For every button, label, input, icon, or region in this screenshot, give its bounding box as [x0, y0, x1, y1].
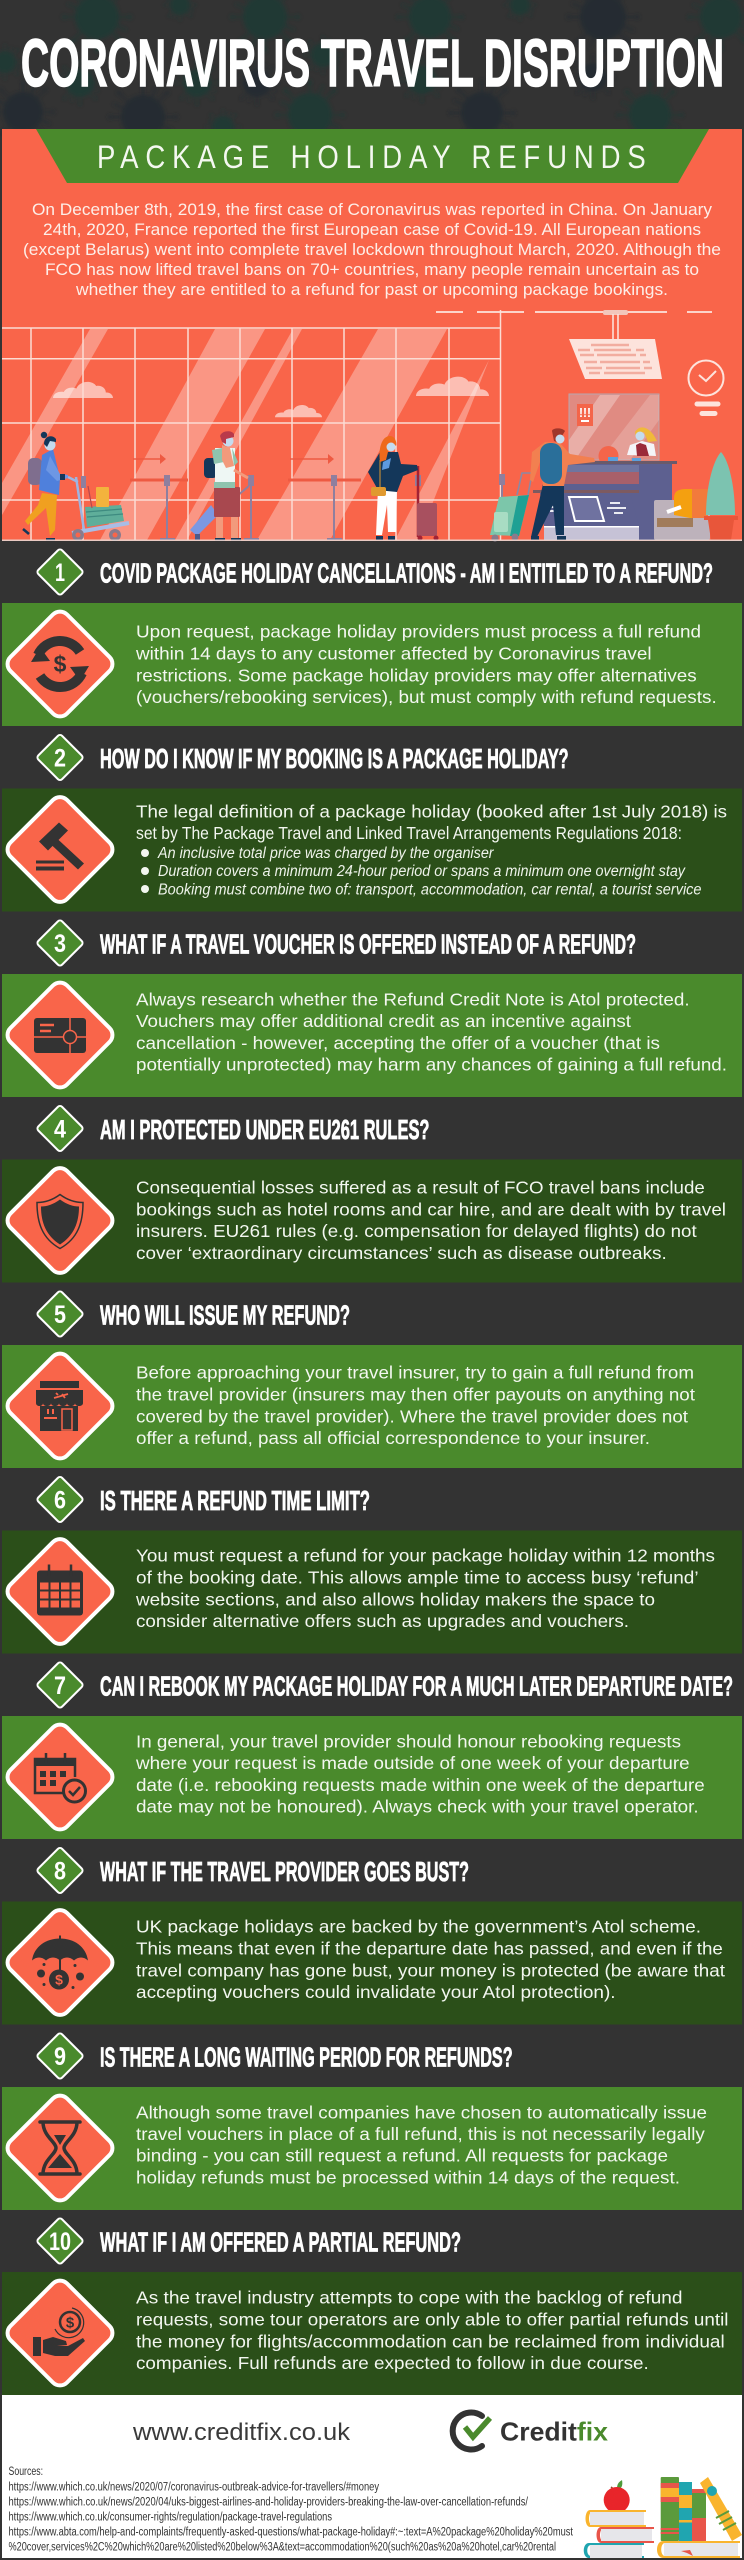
- heading 4: AM I PROTECTED UNDER EU261 RULES?: [100, 1114, 430, 1145]
- body text 3: cancellation - however, accepting the offer of a voucher (that is: [136, 1033, 660, 1053]
- heading 8: WHAT IF THE TRAVEL PROVIDER GOES BUST?: [100, 1856, 469, 1887]
- body text 7: where your request is made outside of one week of your departure: [135, 1753, 690, 1773]
- bullet list: Duration covers a minimum 24-hour period or spans a minimum one overnight stay: [158, 863, 686, 880]
- Creditfix logo: Creditfix: [500, 2417, 609, 2447]
- bullet list: An inclusive total price was charged by the organiser: [157, 845, 494, 862]
- body text 9: [136, 2102, 707, 2187]
- body text 6: of the booking date. This allows ample time to access busy ‘refund’: [136, 1567, 699, 1587]
- number badge 10: 10: [49, 2228, 71, 2256]
- sources: https://www.which.co.uk/consumer-rights/regulation/package-travel-regulations: [8, 2512, 332, 2524]
- body text 8: [136, 1917, 725, 2002]
- panel 3 background: [2, 974, 742, 1097]
- check-in counter: [533, 394, 677, 540]
- body text 4: cover ‘extraordinary circumstances’ such as disease outbreaks.: [136, 1243, 667, 1263]
- icon: hourglass: [3, 2091, 117, 2205]
- number badge 8: [36, 1847, 84, 1894]
- number badge 5: [36, 1290, 84, 1338]
- body text 5: offer a refund, pass all official correspondence to your insurer.: [136, 1428, 650, 1448]
- number badge 7: [36, 1661, 84, 1709]
- glass screen: [569, 394, 659, 460]
- body text 1: (vouchers/rebooking services), but must comply with refund requests.: [136, 687, 717, 707]
- body text 10: [136, 2288, 728, 2373]
- body text 2: The legal definition of a package holiday (booked after 1st July 2018) is: [136, 802, 727, 822]
- body text 6: You must request a refund for your package holiday within 12 months: [136, 1546, 715, 1566]
- icon: gavel: [3, 793, 117, 906]
- section 3: [2, 919, 742, 1097]
- body text 10: requests, some tour operators are only able to offer partial refunds until: [136, 2309, 728, 2329]
- queue barriers: [130, 454, 505, 540]
- window light beams: [2, 329, 489, 540]
- body text 3: Always research whether the Refund Credit Note is Atol protected.: [136, 989, 690, 1009]
- departures board: [569, 310, 662, 379]
- body text 10: As the travel industry attempts to cope with the backlog of refund: [136, 2288, 682, 2308]
- number badge 3: [36, 919, 84, 967]
- section 5: [2, 1290, 742, 1468]
- body text 4: insurers. EU261 rules (e.g. compensation for delayed flights) do not: [136, 1221, 697, 1241]
- number badge 2: [36, 734, 84, 781]
- number badge 6: [36, 1476, 84, 1523]
- body text 2: [136, 802, 727, 898]
- section 2: [2, 734, 742, 912]
- clouds: [53, 377, 489, 417]
- icon: travel shop: [3, 1349, 117, 1463]
- body text 10: companies. Full refunds are expected to follow in due course.: [136, 2353, 649, 2373]
- bench and orange bag: [654, 489, 710, 540]
- subtitle banner: PACKAGE HOLIDAY REFUNDS: [97, 140, 646, 176]
- person 2 with suitcase: [190, 431, 249, 540]
- bullet list: [141, 845, 702, 898]
- panel 8 background: [2, 1902, 742, 2024]
- person 3 with red hair: [368, 436, 438, 540]
- warning sign: [577, 404, 593, 426]
- body text 8: accepting vouchers could invalidate your Atol protection).: [136, 1982, 616, 2002]
- icon: umbrella with money: [3, 1906, 117, 2019]
- person 4 with backpack: [490, 428, 595, 542]
- panel 2 background: [2, 788, 742, 912]
- body text 8: travel company has gone bust, your money is protected (be aware that: [136, 1960, 725, 1980]
- panel 1 background: [2, 603, 742, 726]
- icon: calendar: [3, 1535, 117, 1648]
- clerk: [627, 427, 657, 456]
- body text 5: Before approaching your travel insurer, try to gain a full refund from: [136, 1363, 694, 1383]
- body text 5: covered by the travel provider). Where the travel provider does not: [136, 1406, 688, 1426]
- body text 5: the travel provider (insurers may then offer payouts on anything not: [136, 1384, 695, 1404]
- panel 6 background: [2, 1530, 742, 1654]
- number badge 1: 1: [55, 559, 65, 587]
- body text 6: consider alternative offers such as upgrades and vouchers.: [136, 1611, 629, 1631]
- body text 7: [135, 1731, 705, 1817]
- heading 5: WHO WILL ISSUE MY REFUND?: [100, 1300, 350, 1330]
- sources: [8, 2466, 574, 2554]
- section 1: [2, 548, 742, 726]
- body text 6: [135, 1546, 715, 1631]
- sources: https://www.which.co.uk/news/2020/07/coronavirus-outbreak-advice-for-travellers/#money: [8, 2482, 379, 2494]
- section 10: [2, 2217, 742, 2395]
- body text 10: the money for flights/accommodation can be reclaimed from individual: [136, 2331, 725, 2351]
- icon: umbrella with money: $: [55, 1972, 63, 1988]
- body text 4: [136, 1177, 726, 1263]
- icon: books and apple: [584, 2477, 742, 2558]
- body text 9: travel vouchers in place of a full refund, this is not necessarily legally: [136, 2124, 705, 2144]
- intro text: FCO has now lifted travel bans on 70+ countries, many people remain uncertain as to: [45, 260, 699, 279]
- panel 7 background: [2, 1716, 742, 1839]
- body text 4: bookings such as hotel rooms and car hire, and are dealt with by travel: [136, 1199, 726, 1219]
- number badge 10: [36, 2217, 84, 2265]
- intro text: [23, 200, 721, 299]
- panel 4 background: [2, 1160, 742, 1282]
- wall clock: [688, 360, 724, 414]
- icon: hand with coin: [3, 2276, 117, 2390]
- body text 1: Upon request, package holiday providers must process a full refund: [136, 622, 701, 642]
- number badge 8: 8: [54, 1858, 66, 1886]
- panel 9 background: [2, 2087, 742, 2210]
- body text 1: restrictions. Some package holiday providers may offer alternatives: [136, 665, 697, 685]
- panel: footer: [2, 2395, 742, 2558]
- section 9: [2, 2032, 742, 2210]
- person 1 with trolley: [23, 432, 129, 541]
- intro text: On December 8th, 2019, the first case of Coronavirus was reported in China. On January: [32, 200, 713, 219]
- intro background: [2, 129, 742, 541]
- body text 3: potentially unprotected) may harm any chances of gaining a full refund.: [136, 1055, 727, 1075]
- number badge 9: [36, 2032, 84, 2080]
- window frame: [2, 310, 500, 540]
- body text 7: date (i.e. rebooking requests made within one week of the departure: [136, 1775, 705, 1795]
- sources: https://www.abta.com/help-and-complaints/frequently-asked-questions/what-package-holiday#:~:text=A%20package%20holiday%20must: [8, 2527, 574, 2539]
- floor line: [2, 540, 742, 541]
- icon: hand with coin: $: [66, 2314, 75, 2332]
- body text 9: Although some travel companies have chosen to automatically issue: [136, 2102, 707, 2122]
- number badge 6: 6: [54, 1486, 66, 1514]
- intro text: whether they are entitled to a refund for past or upcoming package bookings.: [75, 280, 668, 299]
- body text 5: [136, 1363, 695, 1448]
- icon: refund cycle: [3, 607, 117, 721]
- number badge 1: [36, 548, 84, 596]
- icon: voucher: [3, 978, 117, 1092]
- sources: %20cover,services%2C%20which%20are%20listed%20below%3A&text=accommodation%20(such%20as%20a%20hotel,car%20rental: [8, 2542, 556, 2554]
- Creditfix logo: [453, 2412, 609, 2450]
- heading 10: WHAT IF I AM OFFERED A PARTIAL REFUND?: [100, 2226, 461, 2258]
- sources: Sources:: [8, 2466, 43, 2478]
- section 4: [2, 1105, 742, 1282]
- section 8: [2, 1847, 742, 2024]
- number badge 2: 2: [54, 744, 66, 772]
- virus pattern background: [0, 0, 744, 152]
- icon: shield: [3, 1164, 117, 1277]
- body text 2: set by The Package Travel and Linked Travel Arrangements Regulations 2018:: [136, 823, 682, 843]
- body text 9: binding - you can still request a refund. All requests for package: [136, 2146, 668, 2166]
- panel: intro: [2, 129, 742, 542]
- body text 9: holiday refunds must be processed within 14 days of the request.: [136, 2167, 680, 2187]
- icon: calendar with check: [3, 1720, 117, 1834]
- warning sign: !!!: [579, 405, 591, 420]
- number badge 5: 5: [54, 1301, 66, 1329]
- number badge 4: [36, 1105, 84, 1152]
- body text 3: Vouchers may offer additional credit as an incentive against: [136, 1011, 631, 1031]
- section 7: [2, 1661, 742, 1839]
- apple: [604, 2480, 630, 2513]
- panel 5 background: [2, 1345, 742, 1468]
- sources: https://www.which.co.uk/news/2020/04/uks-biggest-airlines-and-holiday-providers-breaking-the-law-over-cancellation-refunds/: [8, 2497, 529, 2509]
- section 6: [2, 1476, 742, 1654]
- heading 6: IS THERE A REFUND TIME LIMIT?: [100, 1485, 370, 1516]
- body text 8: This means that even if the departure date has passed, and even if the: [136, 1938, 723, 1958]
- panel 10 background: [2, 2272, 742, 2395]
- body text 8: UK package holidays are backed by the government’s Atol scheme.: [136, 1917, 701, 1937]
- body text 7: date may not be honoured). Always check with your travel operator.: [136, 1797, 699, 1817]
- bottom large book: [657, 2541, 740, 2558]
- body text 1: within 14 days to any customer affected by Coronavirus travel: [135, 643, 652, 663]
- body text 7: In general, your travel provider should honour rebooking requests: [136, 1731, 681, 1751]
- body text 1: [135, 622, 717, 707]
- stacked books: [584, 2510, 654, 2558]
- number badge 4: 4: [54, 1116, 66, 1144]
- intro text: 24th, 2020, France reported the first European case of Covid-19. All European nations: [43, 220, 701, 239]
- body text 4: Consequential losses suffered as a result of FCO travel bans include: [136, 1177, 705, 1197]
- upright books: [661, 2477, 742, 2541]
- number badge 7: 7: [54, 1672, 66, 1700]
- number badge 9: 9: [54, 2043, 66, 2071]
- footer background: [2, 2395, 742, 2558]
- body text 6: website sections, and also allows holiday makers the space to: [135, 1589, 655, 1609]
- potted plant: [704, 452, 738, 540]
- intro text: (except Belarus) went into complete travel lockdown throughout March, 2020. Although the: [23, 240, 721, 259]
- ceiling lights: [436, 311, 712, 313]
- number badge 3: 3: [54, 930, 66, 958]
- subtitle banner: [36, 129, 709, 183]
- bullet list: Booking must combine two of: transport, accommodation, car rental, a tourist service: [158, 881, 702, 898]
- airport scene illustration: [2, 310, 742, 542]
- website url: www.creditfix.co.uk: [132, 2419, 351, 2446]
- body text 3: [136, 989, 727, 1075]
- icon: refund cycle: $: [54, 651, 67, 677]
